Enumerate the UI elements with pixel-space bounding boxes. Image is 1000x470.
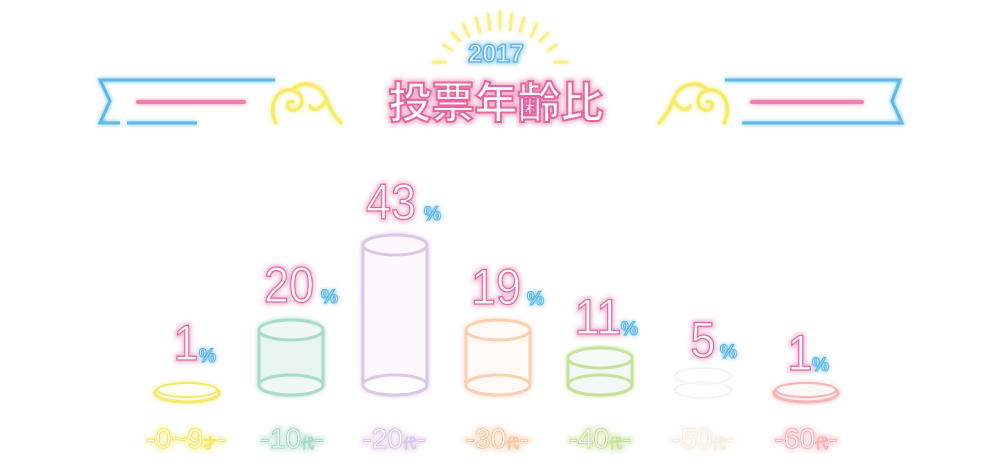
main title: 投票年齢比 xyxy=(388,80,604,128)
percent labels: 19 xyxy=(471,260,521,316)
percent labels: 19 xyxy=(471,260,521,316)
percent signs: % xyxy=(321,287,338,308)
percent labels: 5 xyxy=(690,313,716,369)
decoration: rays xyxy=(433,12,567,62)
bar 50s xyxy=(675,368,731,398)
age labels: -40代- xyxy=(569,423,631,454)
left banner xyxy=(100,80,275,123)
percent signs: % xyxy=(424,204,441,225)
right banner xyxy=(725,80,902,123)
chart: bars xyxy=(155,235,838,402)
left swirl xyxy=(273,84,341,123)
age labels xyxy=(146,423,837,454)
percent labels: 43 xyxy=(366,175,416,231)
age labels: -0~9才- xyxy=(146,423,226,454)
percent signs: % xyxy=(199,346,216,367)
age labels: -20代- xyxy=(363,423,425,454)
percent labels: 43 xyxy=(366,175,416,231)
percent labels xyxy=(173,175,813,382)
percent signs: % xyxy=(527,289,544,310)
age labels: -60代- xyxy=(775,423,837,454)
percent labels: 1 xyxy=(787,326,813,382)
age labels: -40代- xyxy=(569,423,631,454)
right swirl xyxy=(659,84,727,123)
percent labels: 1 xyxy=(173,316,199,372)
main title: 投票年齢比 xyxy=(388,80,604,128)
percent labels: 11 xyxy=(575,290,621,346)
age labels: -10代- xyxy=(261,423,323,454)
year 2017: 2017 xyxy=(468,40,524,68)
age labels: -0~9才- xyxy=(146,423,226,454)
bar 20s xyxy=(363,235,427,395)
age labels: -30代- xyxy=(466,423,528,454)
age labels: -60代- xyxy=(775,423,837,454)
percent signs: % xyxy=(812,355,829,376)
percent labels: 1 xyxy=(173,316,199,372)
age labels: -50代- xyxy=(672,423,734,454)
bar 60s xyxy=(774,383,838,402)
age labels: -20代- xyxy=(363,423,425,454)
percent labels: 1 xyxy=(787,326,813,382)
percent labels: 5 xyxy=(690,313,716,369)
age labels: -30代- xyxy=(466,423,528,454)
bar 30s xyxy=(466,320,530,395)
percent labels: 20 xyxy=(264,258,314,314)
percent labels: 11 xyxy=(575,290,621,346)
age labels: -10代- xyxy=(261,423,323,454)
year 2017: 2017 xyxy=(468,40,524,68)
age labels: -50代- xyxy=(672,423,734,454)
bar 10s xyxy=(259,320,323,395)
percent signs: % xyxy=(720,342,737,363)
percent labels: 20 xyxy=(264,258,314,314)
percent signs: % xyxy=(621,319,638,340)
bar 0-9 xyxy=(155,383,219,402)
bar 40s xyxy=(568,348,632,395)
percent signs xyxy=(199,204,829,376)
